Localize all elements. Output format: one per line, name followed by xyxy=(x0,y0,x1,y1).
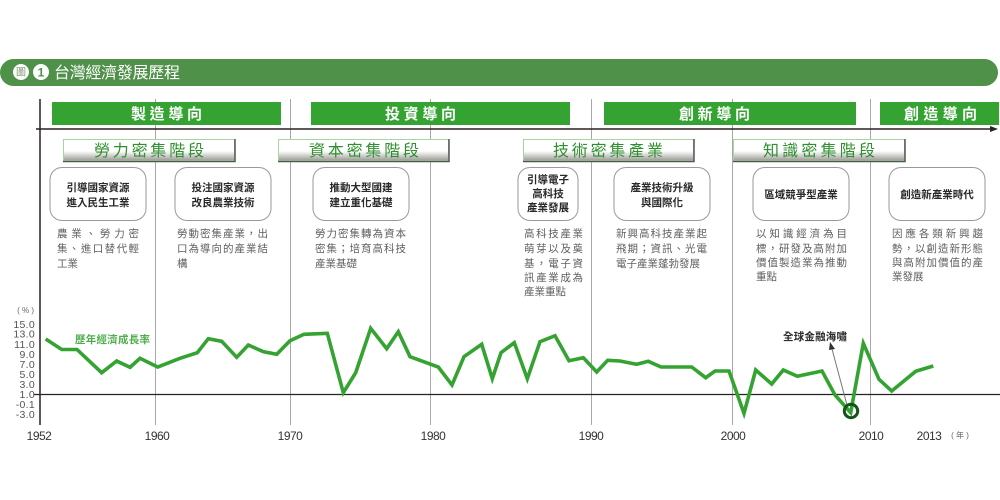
orientation band: innovation: 創新導向 xyxy=(679,105,750,123)
description: stage 6 xyxy=(756,227,847,283)
description: stage 1: 農業、勞力密 xyxy=(57,227,140,240)
vertical axis xyxy=(39,99,41,425)
panel: stage 2: 改良農業技術 xyxy=(192,196,255,209)
orientation band: investment xyxy=(311,102,570,125)
x axis year labels: ( 年 ) xyxy=(951,430,969,440)
panel: stage 2 xyxy=(175,168,271,270)
y axis labels: 15.0 xyxy=(13,319,35,331)
orientation band: manufacturing: 製造導向 xyxy=(131,105,202,123)
description: stage 3: 勞力密集轉為資本 xyxy=(315,227,406,240)
panel: stage 1 xyxy=(50,168,146,270)
description: stage 2 xyxy=(177,227,268,270)
panel: stage 4: 引導電子 xyxy=(527,173,569,186)
description: stage 4 xyxy=(524,227,584,298)
panel: stage 4: 高科技 xyxy=(532,187,564,200)
y axis labels: 5.0 xyxy=(20,369,35,381)
marker: 2009 low point xyxy=(844,404,858,418)
description: stage 7: 勢，以創造新形態 xyxy=(892,242,983,255)
description: stage 4: 訊產業成為 xyxy=(524,271,583,284)
description: stage 4: 產業重點 xyxy=(524,285,566,298)
panel: stage 5 xyxy=(614,168,710,270)
title bar xyxy=(0,59,998,86)
timeline arrow xyxy=(36,126,998,132)
panel: stage 1: 引導國家資源 xyxy=(66,181,130,194)
zero baseline xyxy=(34,394,1000,396)
description: stage 6: 價值製造業為推動 xyxy=(756,256,847,269)
description: stage 5: 飛期；資訊、光電 xyxy=(616,242,708,255)
phase label: capital intensive xyxy=(278,139,449,162)
description: stage 7: 業發展 xyxy=(892,270,924,283)
panel: stage 2: 投注國家資源 xyxy=(192,181,255,194)
panel: stage 7: 創造新產業時代 xyxy=(900,188,974,201)
heading: 台灣經濟發展歷程 xyxy=(54,64,180,82)
panel: stage 5: 與國際化 xyxy=(641,196,683,209)
description: stage 6: 重點 xyxy=(756,270,777,283)
description: stage 5: 電子產業蓬勃發展 xyxy=(616,257,700,270)
x axis year labels: 1980 xyxy=(421,429,446,443)
line chart: annual growth rate xyxy=(46,328,933,413)
panel: stage 4: 產業發展 xyxy=(527,201,569,214)
orientation band: innovation xyxy=(604,102,856,125)
y axis labels: 3.0 xyxy=(20,379,35,391)
x axis year labels: 2013 xyxy=(917,429,942,443)
description: stage 7 xyxy=(892,227,984,283)
panel: stage 6: 區域競爭型產業 xyxy=(764,188,838,201)
x axis year labels: 1960 xyxy=(145,429,170,443)
orientation band: manufacturing xyxy=(52,102,281,125)
orientation band: creation xyxy=(880,102,999,125)
phase label: technology intensive xyxy=(523,139,694,162)
panel: stage 6 xyxy=(753,168,849,283)
icon: number one badge xyxy=(33,64,49,80)
description: stage 3: 密集；培育高科技 xyxy=(315,242,406,255)
callout: global financial crisis: 全球金融海嘯 xyxy=(783,330,848,343)
x axis year labels: 1970 xyxy=(278,429,303,443)
y axis labels: 7.0 xyxy=(20,359,35,371)
y axis labels: 1.0 xyxy=(20,389,35,401)
orientation band: investment: 投資導向 xyxy=(385,105,456,123)
panel: stage 3 xyxy=(313,168,409,270)
description: stage 6: 以知識經濟為目 xyxy=(756,227,847,240)
y axis labels: 13.0 xyxy=(13,328,35,340)
phase label: labour intensive xyxy=(63,139,235,162)
orientation band: creation: 創造導向 xyxy=(904,105,977,123)
description: stage 2: 構 xyxy=(177,257,188,270)
icon: figure badge xyxy=(13,64,29,80)
panel: stage 4 xyxy=(518,168,584,298)
description: stage 1: 工業 xyxy=(57,257,78,270)
description: stage 4: 萌芽以及奠 xyxy=(524,242,584,255)
panel: stage 7 xyxy=(889,168,985,283)
y axis labels: 11.0 xyxy=(14,339,35,351)
description: stage 4: 基，電子資 xyxy=(524,257,584,270)
description: stage 3: 產業基礎 xyxy=(315,257,357,270)
x axis year labels: 1952 xyxy=(27,429,52,443)
description: stage 6: 標，研發及高附加 xyxy=(756,242,847,255)
y axis labels xyxy=(13,306,35,421)
chart label: 歷年經濟成長率 xyxy=(75,333,150,346)
phase label: knowledge intensive xyxy=(733,139,905,162)
description: stage 1 xyxy=(57,227,140,270)
phase label: technology intensive: 技術密集產業 xyxy=(553,142,663,160)
x axis year labels: 2000 xyxy=(721,429,746,443)
phase label: knowledge intensive: 知識密集階段 xyxy=(763,142,875,160)
description: stage 7: 與高附加價值的產 xyxy=(892,256,984,269)
description: stage 5: 新興高科技產業起 xyxy=(616,227,708,240)
panel: stage 3: 建立重化基礎 xyxy=(330,196,393,209)
panel: stage 5: 產業技術升級 xyxy=(630,181,694,194)
y axis labels: ( % ) xyxy=(17,306,34,315)
x axis year labels: 1990 xyxy=(579,429,604,443)
x axis year labels xyxy=(27,429,969,443)
y axis labels: -0.1 xyxy=(16,399,35,411)
description: stage 2: 口為導向的產業結 xyxy=(177,242,268,255)
description: stage 1: 集、進口替代輕 xyxy=(57,242,140,255)
decade grid lines xyxy=(156,99,870,425)
description: stage 3 xyxy=(315,227,406,270)
description: stage 5 xyxy=(616,227,708,270)
y axis labels: -3.0 xyxy=(16,409,35,421)
icon: figure badge: 圖 xyxy=(16,66,26,78)
icon: number one badge: 1 xyxy=(38,66,45,80)
y axis labels: 9.0 xyxy=(20,349,35,361)
x axis year labels: 2010 xyxy=(859,429,884,443)
phase label: labour intensive: 勞力密集階段 xyxy=(94,142,204,160)
description: stage 2: 勞動密集產業，出 xyxy=(177,227,268,240)
description: stage 4: 高科技產業 xyxy=(524,227,583,240)
panel: stage 3: 推動大型國建 xyxy=(330,181,393,194)
phase label: capital intensive: 資本密集階段 xyxy=(309,142,419,160)
description: stage 7: 因應各類新興趨 xyxy=(892,227,984,240)
callout: global financial crisis xyxy=(783,330,848,405)
panel: stage 1: 進入民生工業 xyxy=(66,196,130,209)
